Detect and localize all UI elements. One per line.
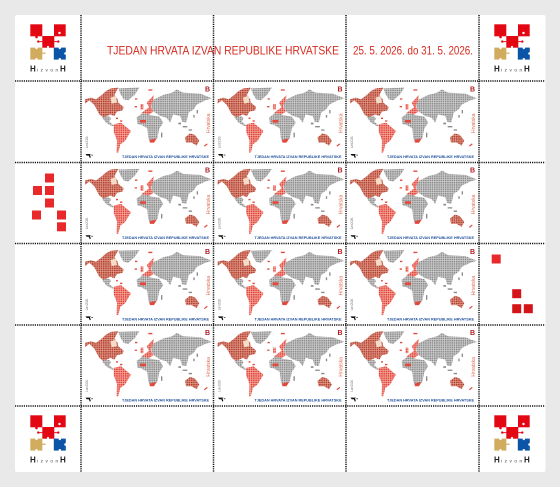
logo: top right: izvon [501,67,522,72]
logo: top right [494,24,531,74]
stamp row 2 column 1: Hrvatska [206,194,212,214]
logo: bottom left: izvon [37,458,58,463]
stamp row 1 column 2: Lani 2026. [218,136,222,148]
logo: bottom right: H [524,456,530,465]
stamp row 4 column 3: Lani 2026. [350,380,354,392]
stamp row 4 column 2 [218,330,344,403]
stamp row 4 column 3: Hrvatska [471,356,477,377]
logo: bottom right [494,415,531,465]
logo: top left [30,24,67,74]
logo: bottom right: H [494,456,500,465]
logo: bottom left: H [30,456,36,465]
stamp row 3 column 1: Lani 2026. [85,298,89,310]
stamp row 2 column 2 [218,168,344,240]
stamp row 3 column 2: Lani 2026. [218,298,222,310]
stamp row 4 column 1: Hrvatska [206,356,212,377]
stamp row 3 column 1 [85,249,212,321]
stamp row 2 column 2: B [338,168,343,175]
stamp row 1 column 1 [85,86,212,159]
stamp row 4 column 2: B [338,330,343,337]
stamp row 4 column 1: TJEDAN HRVATA IZVAN REPUBLIKE HRVATSKE [122,399,210,403]
stamp row 3 column 2: Hrvatska [338,275,344,295]
stamp row 4 column 1: Lani 2026. [85,380,89,392]
stamp row 1 column 1: B [205,86,210,94]
logo: top right: H [524,65,530,74]
stamp row 1 column 3: Lani 2026. [350,136,354,148]
logo: top left: H [60,65,66,74]
stamp row 3 column 2: B [338,249,343,256]
title: TJEDAN HRVATA IZVAN REPUBLIKE HRVATSKE [107,44,339,57]
stamp row 4 column 2: TJEDAN HRVATA IZVAN REPUBLIKE HRVATSKE [254,399,342,403]
stamp row 3 column 2: TJEDAN HRVATA IZVAN REPUBLIKE HRVATSKE [254,317,342,321]
stamp row 4 column 3: B [470,330,475,337]
stamp row 3 column 3: Lani 2026. [350,298,354,310]
stamp row 4 column 2: Hrvatska [338,356,344,377]
stamp row 2 column 3: Lani 2026. [350,217,354,229]
logo: bottom left [30,415,67,465]
stamp row 2 column 1: B [205,168,210,175]
date range: 25. 5. 2026. do 31. 5. 2026. [353,44,473,57]
logo: top left: H [30,65,36,74]
logo: bottom left: H [60,456,66,465]
stamp row 4 column 1: B [205,330,210,337]
stamp row 3 column 1: TJEDAN HRVATA IZVAN REPUBLIKE HRVATSKE [122,317,210,321]
stamp row 2 column 3 [350,168,477,240]
red squares: right margin [492,254,533,313]
stamp row 1 column 2: B [338,86,343,94]
stamp row 1 column 1: TJEDAN HRVATA IZVAN REPUBLIKE HRVATSKE [122,155,210,159]
red squares: left margin [32,174,66,231]
stamp row 2 column 1: TJEDAN HRVATA IZVAN REPUBLIKE HRVATSKE [122,236,210,240]
stamp row 3 column 3: Hrvatska [471,275,477,295]
stamp row 1 column 2 [218,86,344,159]
stamp row 2 column 2: Hrvatska [338,194,344,214]
stamp row 3 column 3: B [470,249,475,256]
stamp row 2 column 2: TJEDAN HRVATA IZVAN REPUBLIKE HRVATSKE [254,236,342,240]
stamp row 4 column 3: TJEDAN HRVATA IZVAN REPUBLIKE HRVATSKE [387,399,475,403]
stamp row 2 column 2: Lani 2026. [218,217,222,229]
logo: top right: H [494,65,500,74]
stamp row 1 column 3: TJEDAN HRVATA IZVAN REPUBLIKE HRVATSKE [387,155,475,159]
stamp row 3 column 1: Hrvatska [206,275,212,295]
stamp row 1 column 3 [350,86,477,159]
stamp row 3 column 2 [218,249,344,321]
stamp row 1 column 3: Hrvatska [471,113,477,133]
stamp row 2 column 3: B [470,168,475,175]
logo: bottom right: izvon [501,458,522,463]
stamp row 4 column 3 [350,330,477,403]
stamp row 3 column 1: B [205,249,210,256]
stamp row 1 column 2: TJEDAN HRVATA IZVAN REPUBLIKE HRVATSKE [254,155,342,159]
stamp row 1 column 2: Hrvatska [338,113,344,133]
stamp row 4 column 2: Lani 2026. [218,380,222,392]
stamp row 2 column 1 [85,168,212,240]
stamp row 1 column 3: B [470,86,475,94]
stamp row 3 column 3 [350,249,477,321]
stamp row 2 column 3: Hrvatska [471,194,477,214]
stamp row 4 column 1 [85,330,212,403]
logo: top left: izvon [37,67,58,72]
stamp row 2 column 1: Lani 2026. [85,217,89,229]
stamp row 1 column 1: Hrvatska [206,113,212,133]
stamp row 3 column 3: TJEDAN HRVATA IZVAN REPUBLIKE HRVATSKE [387,317,475,321]
stamp row 1 column 1: Lani 2026. [85,136,89,148]
stamp row 2 column 3: TJEDAN HRVATA IZVAN REPUBLIKE HRVATSKE [387,236,475,240]
